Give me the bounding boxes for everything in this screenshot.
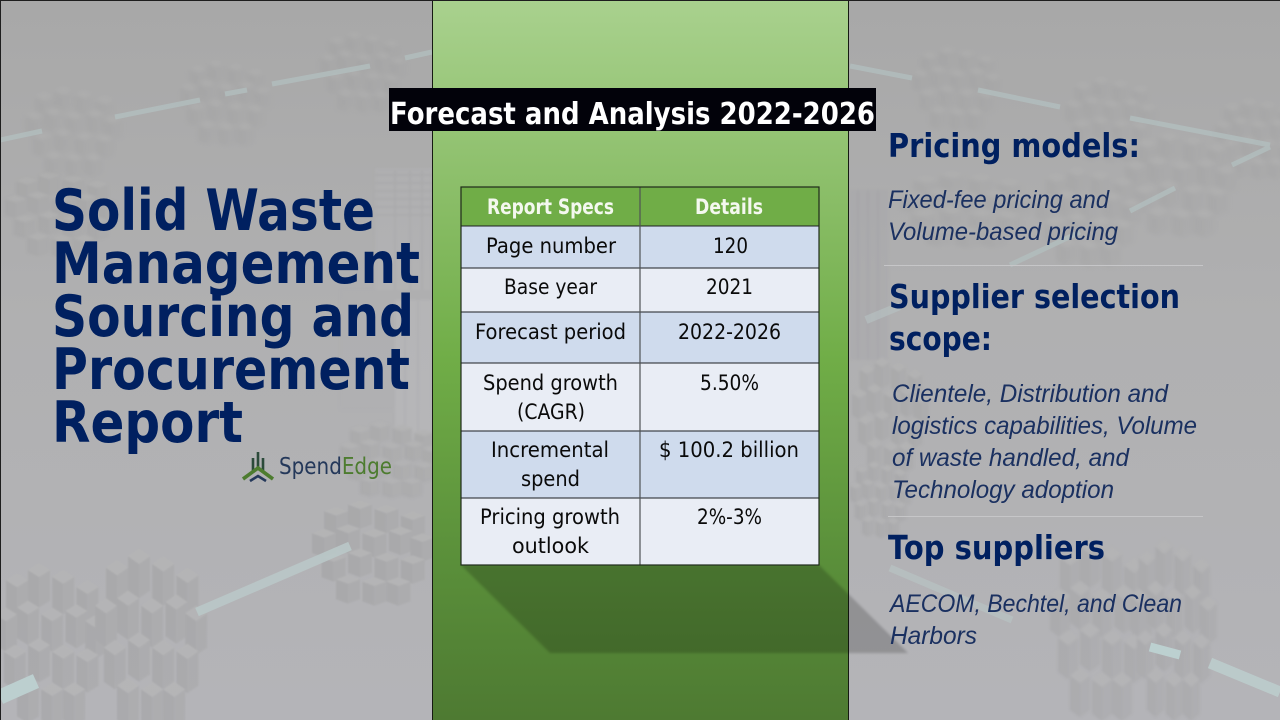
- report title: Sourcing and: [52, 284, 414, 350]
- report title: Solid Waste: [52, 178, 375, 244]
- row: incremental spend: Incremental: [491, 438, 609, 462]
- table shadow: [461, 565, 908, 653]
- panel: left background: [0, 0, 442, 720]
- table: report specs: [461, 187, 819, 565]
- row: base year: [461, 268, 819, 312]
- section: top suppliers: [888, 528, 1182, 650]
- section: supplier selection scope: Clientele, Distribution and: [892, 380, 1169, 408]
- section: top suppliers: Harbors: [890, 622, 977, 650]
- row: spend growth: (CAGR): [517, 400, 585, 424]
- panel: center green column: [432, 0, 849, 720]
- row: spend growth: [461, 363, 819, 431]
- row: pricing growth outlook: Pricing growth: [480, 505, 620, 529]
- section: supplier selection scope: Supplier selection: [889, 277, 1180, 316]
- section: supplier selection scope: of waste handled, and: [892, 444, 1130, 472]
- row: base year: 2021: [706, 275, 753, 299]
- row: base year: Base year: [504, 275, 597, 299]
- row: incremental spend: spend: [521, 467, 580, 491]
- row: pricing growth outlook: [461, 498, 819, 565]
- row: forecast period: Forecast period: [475, 320, 626, 344]
- row: forecast period: [461, 312, 819, 363]
- report title: [52, 178, 420, 456]
- table header: Details: [695, 195, 763, 219]
- row: page number: 120: [713, 234, 748, 258]
- row: pricing growth outlook: outlook: [512, 534, 590, 558]
- section: supplier selection scope: [889, 277, 1197, 504]
- report title: Report: [52, 390, 243, 456]
- row: incremental spend: [461, 431, 819, 498]
- row: page number: [461, 226, 819, 268]
- section: pricing models: Volume-based pricing: [888, 218, 1118, 246]
- report title: Management: [52, 231, 420, 297]
- section: pricing models: Fixed-fee pricing and: [888, 186, 1110, 214]
- panel: right background: [849, 0, 1280, 720]
- row: incremental spend: $ 100.2 billion: [659, 438, 799, 462]
- table header: [461, 187, 819, 226]
- row: pricing growth outlook: 2%-3%: [697, 505, 762, 529]
- table header: Report Specs: [487, 195, 614, 219]
- section: pricing models: [888, 126, 1140, 246]
- row: spend growth: 5.50%: [700, 371, 759, 395]
- icon: SpendEdge mark: [243, 452, 273, 481]
- forecast banner: Forecast and Analysis 2022-2026: [390, 97, 875, 132]
- section: supplier selection scope: logistics capabilities, Volume: [892, 412, 1197, 440]
- section: top suppliers: Top suppliers: [888, 528, 1105, 567]
- report title: Procurement: [52, 337, 410, 403]
- row: spend growth: Spend growth: [483, 371, 618, 395]
- section: supplier selection scope: Technology adoption: [892, 476, 1114, 504]
- logo wordmark: SpendEdge: [279, 454, 392, 480]
- section: pricing models: Pricing models:: [888, 126, 1140, 165]
- logo: SpendEdge: [243, 452, 392, 481]
- row: page number: Page number: [486, 234, 616, 258]
- row: forecast period: 2022-2026: [678, 320, 781, 344]
- section: top suppliers: AECOM, Bechtel, and Clean: [888, 590, 1182, 618]
- section: supplier selection scope: scope:: [889, 319, 992, 358]
